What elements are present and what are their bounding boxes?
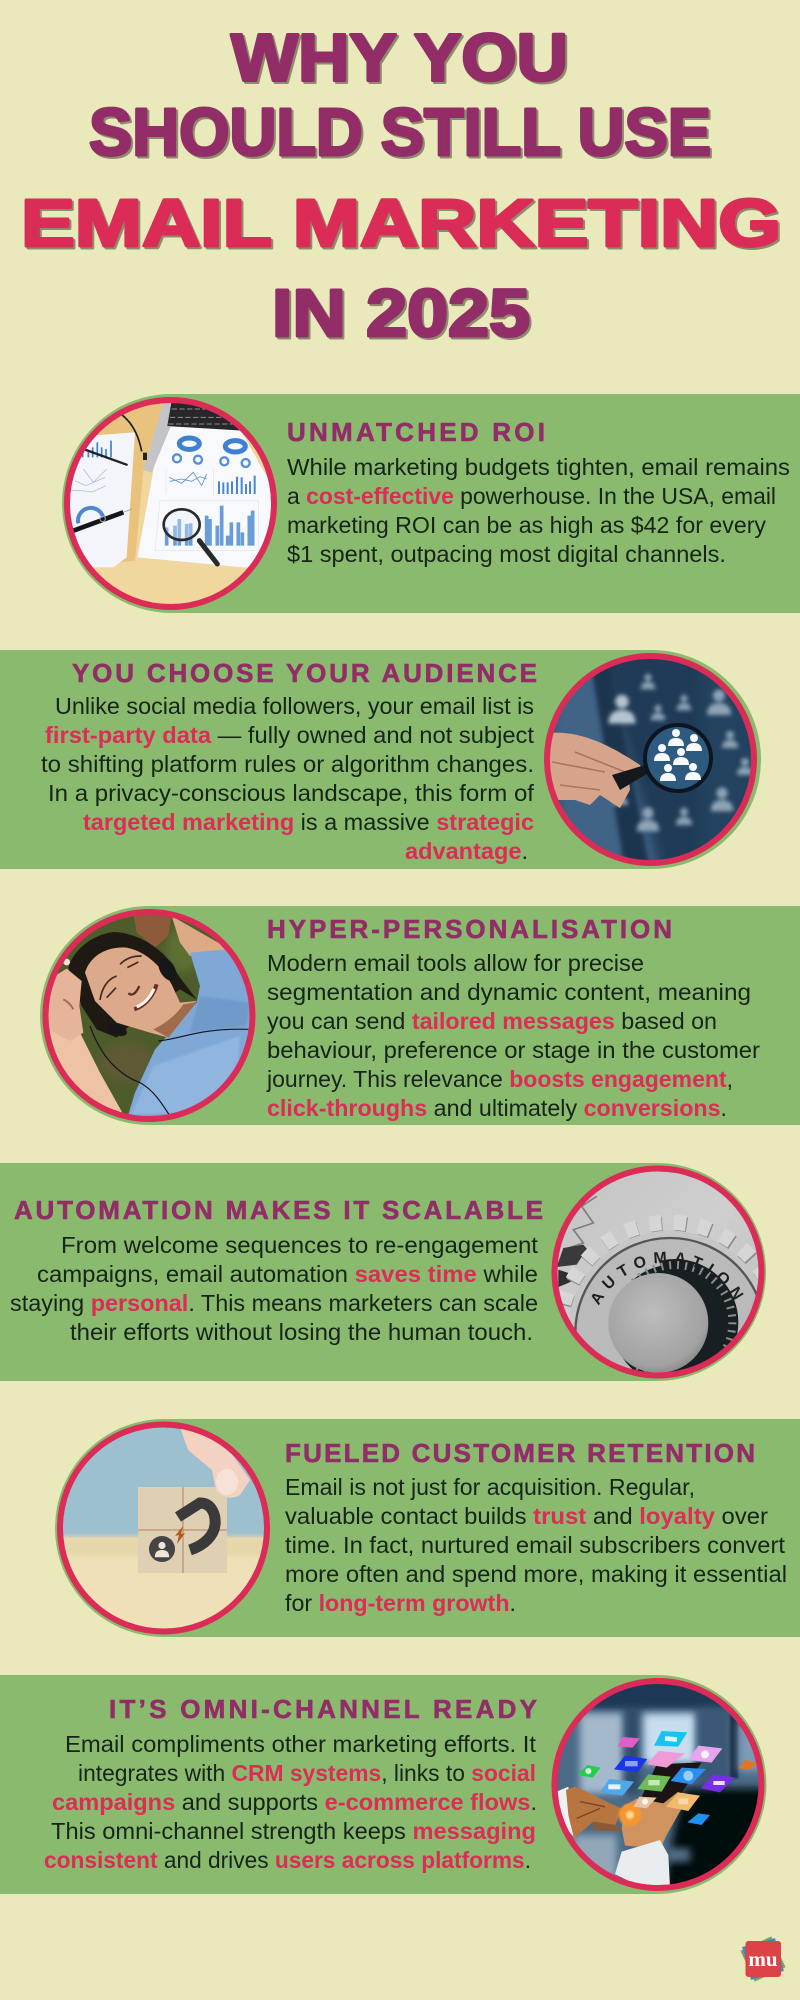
body text: valuable contact builds trust and loyalty over [285, 1503, 768, 1529]
green band [40, 906, 800, 1125]
green band [0, 1675, 766, 1894]
panel: hyper-personalisation [40, 906, 800, 1126]
heading: FUELED CUSTOMER RETENTION [285, 1438, 755, 1468]
body text: targeted marketing is a massive strategic [83, 809, 534, 835]
body text: Unlike social media followers, your email list is [55, 693, 534, 719]
body text: click-throughs and ultimately conversions. [267, 1095, 727, 1121]
body text: time. In fact, nurtured email subscribers convert [285, 1532, 785, 1558]
body text: journey. This relevance boosts engagement, [266, 1066, 733, 1092]
photo: automation gears [552, 1166, 764, 1378]
body text: you can send tailored messages based on [267, 1008, 717, 1034]
heading: UNMATCHED ROI [287, 417, 545, 447]
photo: hands with phone and app icons [550, 1675, 770, 1895]
green band [0, 650, 761, 869]
logo: mu [740, 1936, 786, 1982]
body text: campaigns and supports e-commerce flows. [52, 1789, 537, 1815]
body text: segmentation and dynamic content, meaning [267, 979, 751, 1005]
gear label: AUTOMATION [592, 1252, 744, 1306]
body text: for long-term growth. [285, 1590, 516, 1616]
title line: in 2025: IN 2025 [272, 276, 530, 351]
body text: staying personal. This means marketers can scale [10, 1290, 538, 1316]
body text [10, 1232, 538, 1345]
title [21, 20, 781, 351]
body text [266, 950, 760, 1121]
green band [0, 1163, 766, 1381]
photo: magnet on wooden blocks [55, 1420, 275, 1638]
body text [41, 693, 534, 864]
app icons [577, 1731, 757, 1825]
panel: omni-channel ready [0, 1675, 770, 1895]
body text: integrates with CRM systems, links to social [78, 1760, 536, 1786]
panel: fueled customer retention [55, 1419, 800, 1638]
body text: From welcome sequences to re-engagement [61, 1232, 538, 1258]
body text: marketing ROI can be as high as $42 for every [287, 512, 766, 538]
green band [55, 1419, 800, 1637]
body text: campaigns, email automation saves time while [37, 1261, 538, 1287]
logo: mu: mu [748, 1947, 778, 1971]
body text: Email is not just for acquisition. Regular, [285, 1474, 695, 1500]
panel: automation makes it scalable [0, 1163, 766, 1381]
title line: why you: WHY YOU [231, 20, 568, 96]
body text: In a privacy-conscious landscape, this form of [48, 780, 534, 806]
panel: unmatched ROI [60, 394, 800, 614]
photo: smiling man with headphones [40, 906, 260, 1126]
body text: Email compliments other marketing efforts. It [65, 1731, 536, 1757]
title line: email marketing: EMAIL MARKETING [21, 186, 781, 261]
body text: Modern email tools allow for precise [267, 950, 644, 976]
heading: IT’S OMNI-CHANNEL READY [109, 1694, 537, 1724]
body text: to shifting platform rules or algorithm changes. [41, 751, 534, 777]
heading: AUTOMATION MAKES IT SCALABLE [14, 1195, 543, 1225]
body text: advantage. [405, 838, 528, 864]
body text [285, 1474, 787, 1616]
panel: you choose your audience [0, 650, 770, 870]
body text [44, 1731, 537, 1873]
icon details [585, 1736, 725, 1805]
title line: should still use: SHOULD STILL USE [89, 95, 711, 170]
photo: magnifier over people icons [544, 653, 757, 866]
body text: their efforts without losing the human touch. [70, 1319, 533, 1345]
heading: HYPER-PERSONALISATION [267, 914, 672, 944]
green band [62, 394, 800, 613]
body text: first-party data — fully owned and not subject [45, 722, 534, 748]
body text: a cost-effective powerhouse. In the USA, email [287, 483, 776, 509]
heading: YOU CHOOSE YOUR AUDIENCE [72, 658, 537, 688]
body text: While marketing budgets tighten, email remains [287, 454, 790, 480]
body text: behaviour, preference or stage in the customer [267, 1037, 760, 1063]
body text [287, 454, 790, 567]
photo: charts on desk [60, 394, 280, 614]
body text: $1 spent, outpacing most digital channels. [287, 541, 726, 567]
body text: more often and spend more, making it essential [285, 1561, 787, 1587]
body text: consistent and drives users across platforms. [44, 1847, 531, 1873]
body text: This omni-channel strength keeps messaging [51, 1818, 536, 1844]
